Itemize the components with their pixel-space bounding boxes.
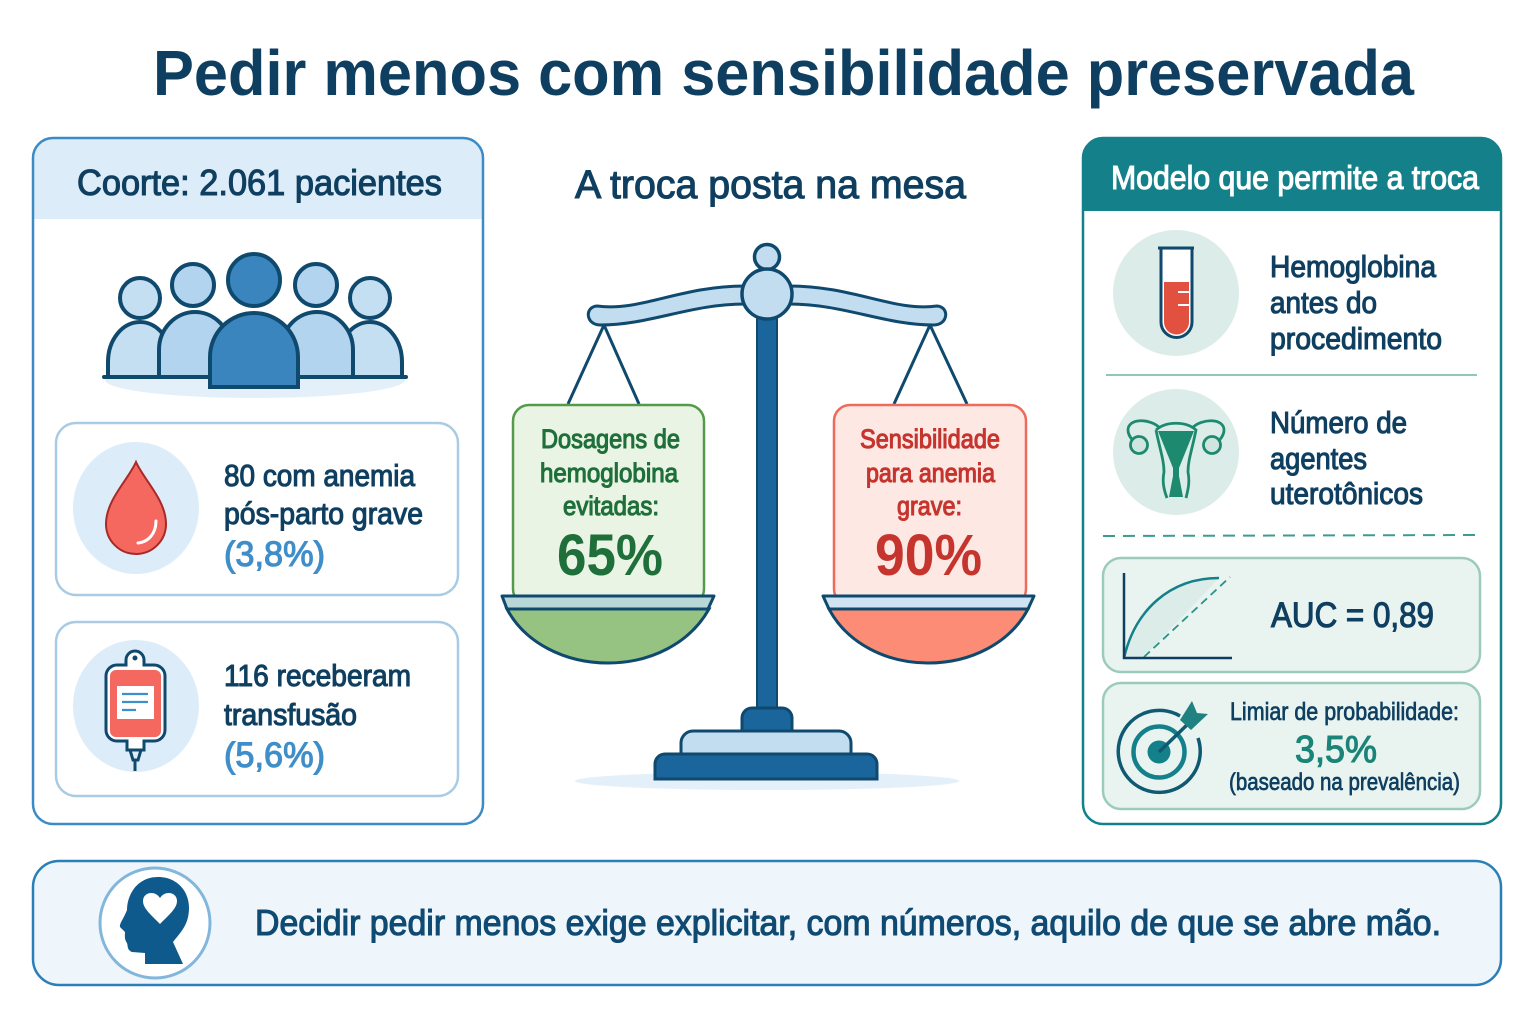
card: AUC	[1103, 558, 1480, 672]
threshold text: (baseado na prevalência)	[1229, 769, 1460, 796]
right card text: para anemia	[866, 458, 996, 488]
icon: head with heart	[100, 868, 210, 978]
threshold text: 3,5%	[1295, 729, 1377, 771]
right card text: grave:	[897, 491, 962, 521]
panel border	[33, 138, 483, 824]
right card text	[860, 424, 1000, 588]
balance scale	[502, 244, 1034, 790]
left bowl	[507, 609, 709, 663]
banner background	[33, 861, 1501, 985]
right card	[834, 405, 1026, 605]
scale pillar	[757, 310, 777, 708]
AUC value: AUC = 0,89	[1271, 596, 1434, 635]
right bowl	[829, 609, 1028, 663]
icon: blood drop	[73, 442, 199, 574]
AUC card border	[1103, 558, 1480, 672]
center heading: A troca posta na mesa	[575, 163, 967, 207]
anemia text: (3,8%)	[224, 535, 325, 574]
card: transfusion	[56, 622, 458, 796]
icon: ROC curve	[1124, 573, 1232, 658]
panel header band	[33, 138, 483, 219]
left card text: Dosagens de	[541, 424, 680, 454]
cohort heading: Coorte: 2.061 pacientes	[77, 162, 442, 203]
panel border	[1083, 138, 1501, 824]
hemoglobin text	[1270, 249, 1442, 356]
icon: group of people	[104, 254, 406, 398]
hemoglobin text: antes do	[1270, 285, 1377, 320]
right rim	[823, 596, 1034, 609]
transfusion text	[224, 658, 411, 775]
transfusion text: transfusão	[224, 697, 357, 732]
uterotonics text	[1270, 405, 1423, 511]
scale strings	[568, 325, 967, 404]
anemia text: 80 com anemia	[224, 458, 416, 493]
title: Pedir menos com sensibilidade preservada	[153, 37, 1414, 109]
scale beam	[588, 286, 946, 325]
threshold card border	[1103, 683, 1480, 809]
transfusion text: 116 receberam	[224, 658, 411, 693]
uterotonics text: agentes	[1270, 441, 1367, 476]
left card text: evitadas:	[563, 491, 659, 521]
uterotonics text: uterotônicos	[1270, 476, 1423, 511]
scale hub	[742, 269, 792, 319]
uterotonics text: Número de	[1270, 405, 1407, 440]
model heading: Modelo que permite a troca	[1111, 159, 1480, 196]
card: threshold	[1103, 683, 1480, 809]
panel background	[33, 138, 483, 824]
card border	[56, 622, 458, 796]
threshold text: Limiar de probabilidade:	[1230, 698, 1459, 726]
icon: test tube	[1113, 230, 1239, 356]
panel: model	[1083, 138, 1501, 824]
left pan: avoided tests	[502, 405, 714, 663]
hemoglobin text: procedimento	[1270, 321, 1442, 356]
scale shadow	[575, 772, 959, 790]
scale base	[655, 708, 877, 779]
panel header band	[1083, 138, 1501, 211]
anemia text	[224, 458, 423, 574]
banner: closing message	[33, 861, 1501, 985]
icon: target	[1118, 701, 1208, 792]
left card text: hemoglobina	[540, 458, 679, 488]
left card text: 65%	[557, 523, 663, 588]
panel background	[1083, 138, 1501, 824]
left card	[513, 405, 704, 605]
icon: uterus	[1113, 389, 1239, 515]
banner text: Decidir pedir menos exige explicitar, com números, aquilo de que se abre mão.	[255, 902, 1441, 943]
right card text: 90%	[875, 523, 982, 588]
left rim	[502, 596, 714, 609]
icon: blood bag	[73, 640, 199, 772]
card border	[56, 423, 458, 595]
hemoglobin text: Hemoglobina	[1270, 249, 1437, 284]
right card text: Sensibilidade	[860, 424, 1000, 454]
right pan: sensitivity	[823, 405, 1034, 663]
transfusion text: (5,6%)	[224, 736, 325, 775]
scale top knob	[754, 244, 780, 270]
threshold text	[1229, 698, 1460, 796]
left card text	[540, 424, 680, 588]
anemia text: pós-parto grave	[224, 496, 423, 531]
card: severe anemia	[56, 423, 458, 595]
panel: cohort	[33, 138, 483, 824]
